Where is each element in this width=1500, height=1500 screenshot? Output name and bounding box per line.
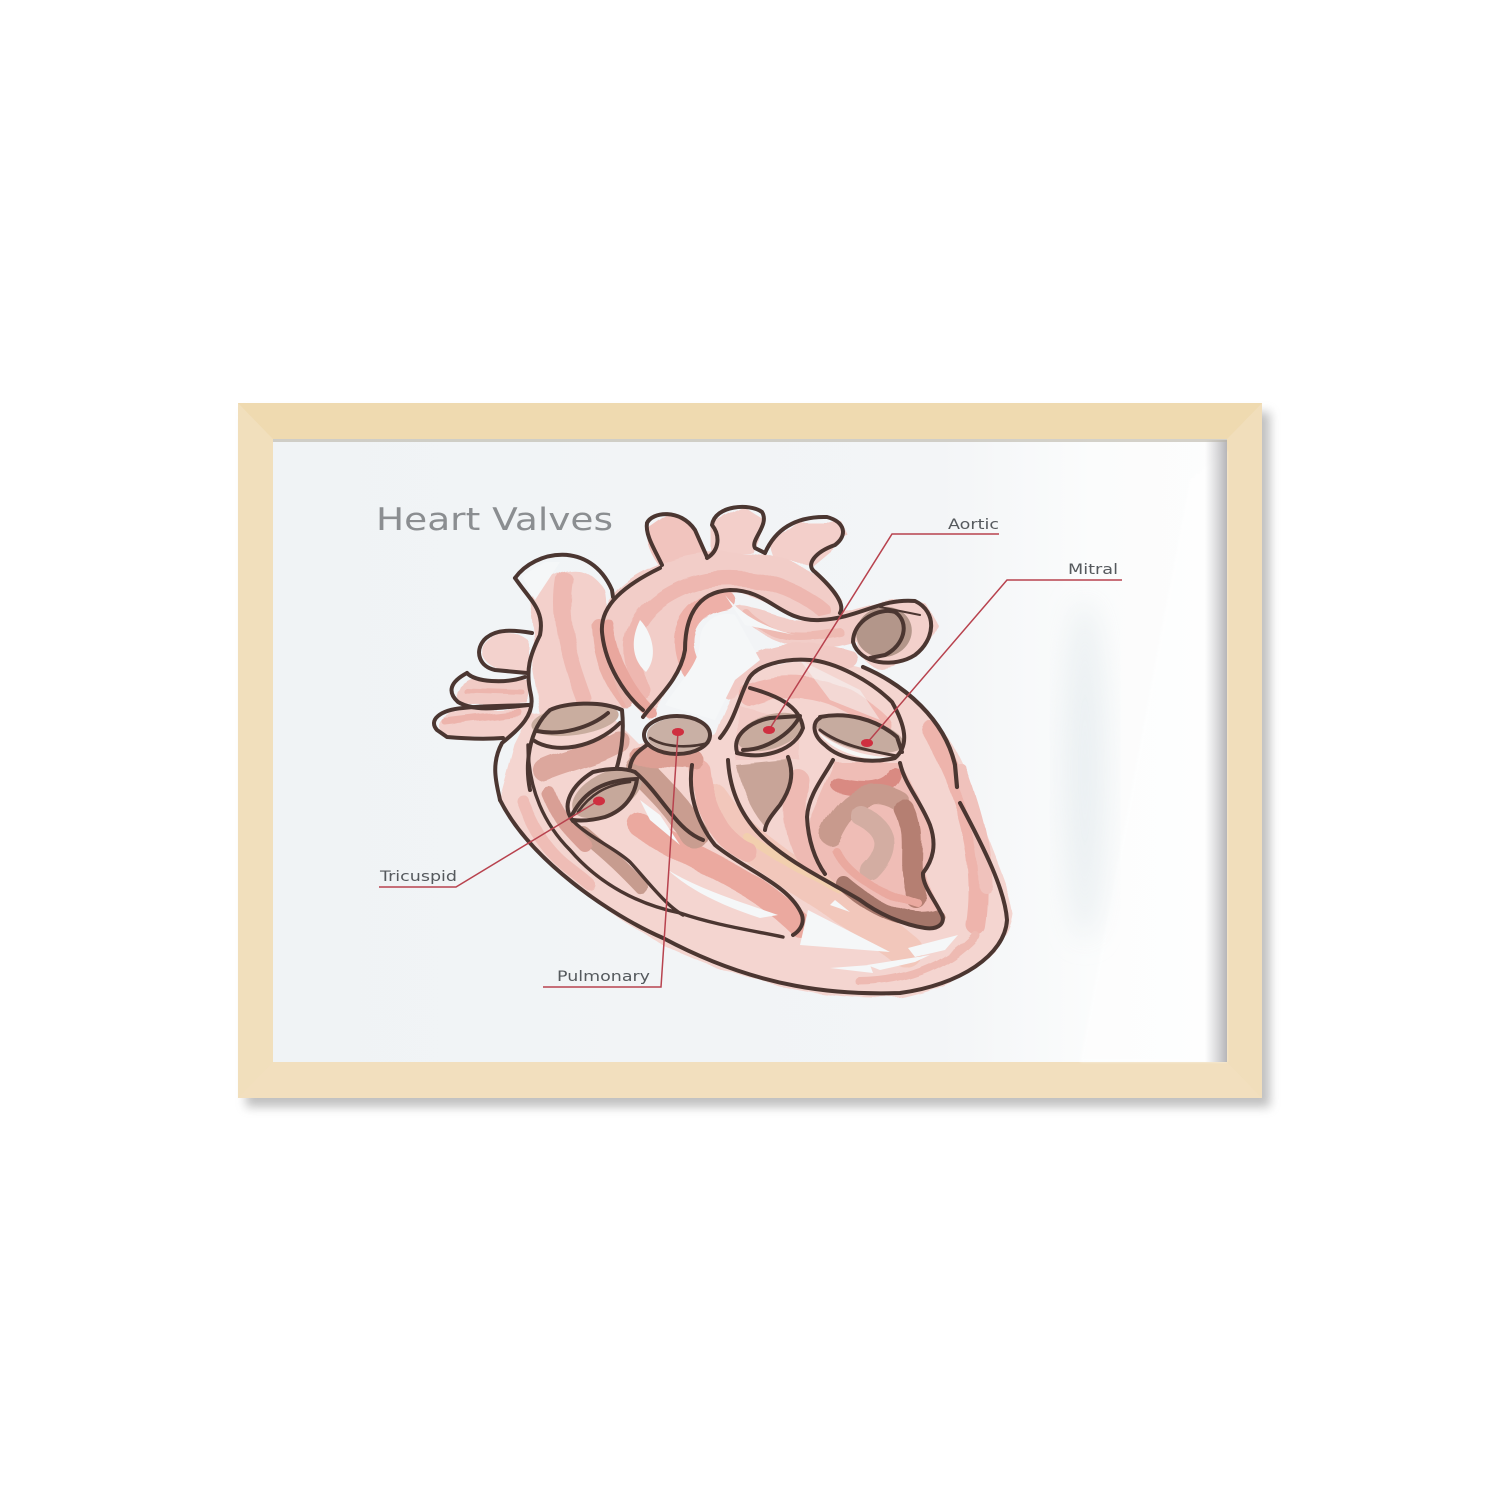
- frame shadow: [246, 412, 1270, 1107]
- outline: right atrium valve: [528, 704, 623, 790]
- outline: aortic branches: [647, 514, 707, 565]
- valve: mitral fill: [812, 708, 908, 760]
- outline: vena cava: [515, 555, 613, 597]
- wash: left ventricle: [811, 762, 938, 925]
- callout: pulmonary: Pulmonary: [557, 969, 650, 985]
- canvas print: [273, 439, 1227, 1062]
- wash: aortic arch: [600, 552, 842, 720]
- callout: tricuspid: Tricuspid: [379, 869, 457, 885]
- wash: right ventricle dark tones: [545, 742, 618, 770]
- outline: aorta: [602, 568, 660, 710]
- wash: aortic branches: [647, 514, 707, 572]
- callout: mitral: [861, 562, 1122, 747]
- heart illustration: [434, 507, 1014, 998]
- heart outlines: [434, 507, 1007, 993]
- outline: left atrium: [720, 660, 904, 761]
- callout: aortic: Aortic: [948, 517, 999, 533]
- valve: aortic fill: [732, 705, 808, 759]
- callout: aortic: [763, 517, 999, 734]
- wash: heart body base: [500, 661, 1014, 998]
- outline: pulmonary veins: [479, 631, 532, 673]
- wash: septum bands: [640, 825, 800, 925]
- wash highlights: [522, 562, 958, 973]
- valve: tricuspid fill: [564, 758, 650, 828]
- callout: pulmonary: [543, 728, 684, 987]
- outline: mitral valve: [820, 715, 902, 752]
- outline: right ventricle: [528, 745, 783, 937]
- wash: outer wall tones: [930, 730, 978, 925]
- wash: vena cava: [530, 570, 625, 720]
- outline: ventricular curves: [630, 745, 647, 767]
- outline: aortic valve: [736, 716, 800, 752]
- watercolor washes: [440, 508, 1014, 998]
- wash: left atrium band: [730, 652, 850, 690]
- callout: mitral: Mitral: [1068, 562, 1118, 578]
- wash: vein lobes: [481, 633, 528, 675]
- outline: tricuspid valve: [568, 769, 703, 840]
- wooden frame: [238, 403, 1262, 1098]
- outline: outer wall: [500, 800, 1007, 993]
- callout: tricuspid: [379, 796, 605, 887]
- valve: right atrium fill: [529, 699, 621, 741]
- title: Heart Valves: [376, 502, 613, 538]
- outline: pulmonary valve: [644, 716, 710, 754]
- valve: pulmonary artery opening fill: [850, 601, 918, 663]
- wash: teardrop: [736, 760, 790, 828]
- valve: pulmonary fill: [647, 718, 709, 752]
